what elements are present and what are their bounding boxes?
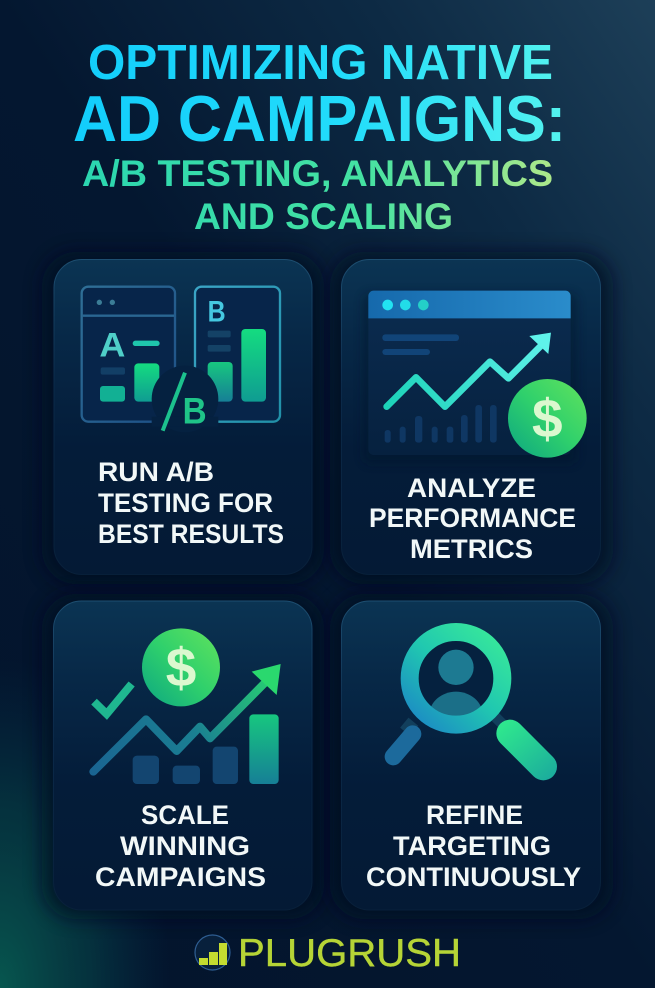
icon: magnifier with person [393, 632, 543, 767]
label: analyze performance metrics: METRICS [410, 534, 533, 564]
icon: logo bars [195, 935, 230, 970]
panel: refine targeting [330, 594, 613, 919]
label: refine targeting: REFINE [426, 800, 523, 830]
icon: A/B test windows [82, 287, 280, 432]
title [73, 36, 566, 237]
label: analyze performance metrics: ANALYZE [407, 473, 536, 503]
icon: A/B badge [152, 366, 218, 432]
label: scale winning campaigns [95, 800, 266, 892]
title: A/B TESTING, ANALYTICS [82, 153, 553, 194]
icon: analytics window with coin [363, 291, 587, 463]
icon: A/B test windows: A [99, 327, 125, 365]
label: run A/B testing: BEST RESULTS [98, 519, 284, 549]
icon: A/B test windows: B [208, 295, 226, 328]
label: run A/B testing [98, 457, 284, 549]
panel: run A/B testing [42, 252, 324, 584]
label: run A/B testing: RUN A/B [98, 457, 214, 487]
label: refine targeting: CONTINUOUSLY [366, 862, 581, 892]
label: run A/B testing: TESTING FOR [98, 488, 273, 518]
title: AND SCALING [194, 196, 453, 237]
panel: analyze performance metrics [330, 252, 613, 584]
label: refine targeting: TARGETING [393, 831, 551, 861]
icon: A/B badge: B [183, 389, 207, 431]
label: scale winning campaigns: WINNING [120, 831, 250, 861]
icon: analytics window with coin: $ [532, 387, 563, 449]
logo: PlugRush: PLUGRUSH [238, 932, 461, 975]
label: analyze performance metrics [369, 473, 576, 564]
icon: growth chart with coin [93, 628, 281, 784]
title: AD CAMPAIGNS: [73, 82, 566, 155]
label: analyze performance metrics: PERFORMANCE [369, 503, 576, 533]
panel: scale winning campaigns [42, 594, 324, 919]
label: refine targeting [366, 800, 581, 892]
icon: growth chart with coin: $ [166, 637, 196, 699]
label: scale winning campaigns: SCALE [141, 800, 229, 830]
title: OPTIMIZING NATIVE [88, 36, 553, 90]
label: scale winning campaigns: CAMPAIGNS [95, 862, 266, 892]
